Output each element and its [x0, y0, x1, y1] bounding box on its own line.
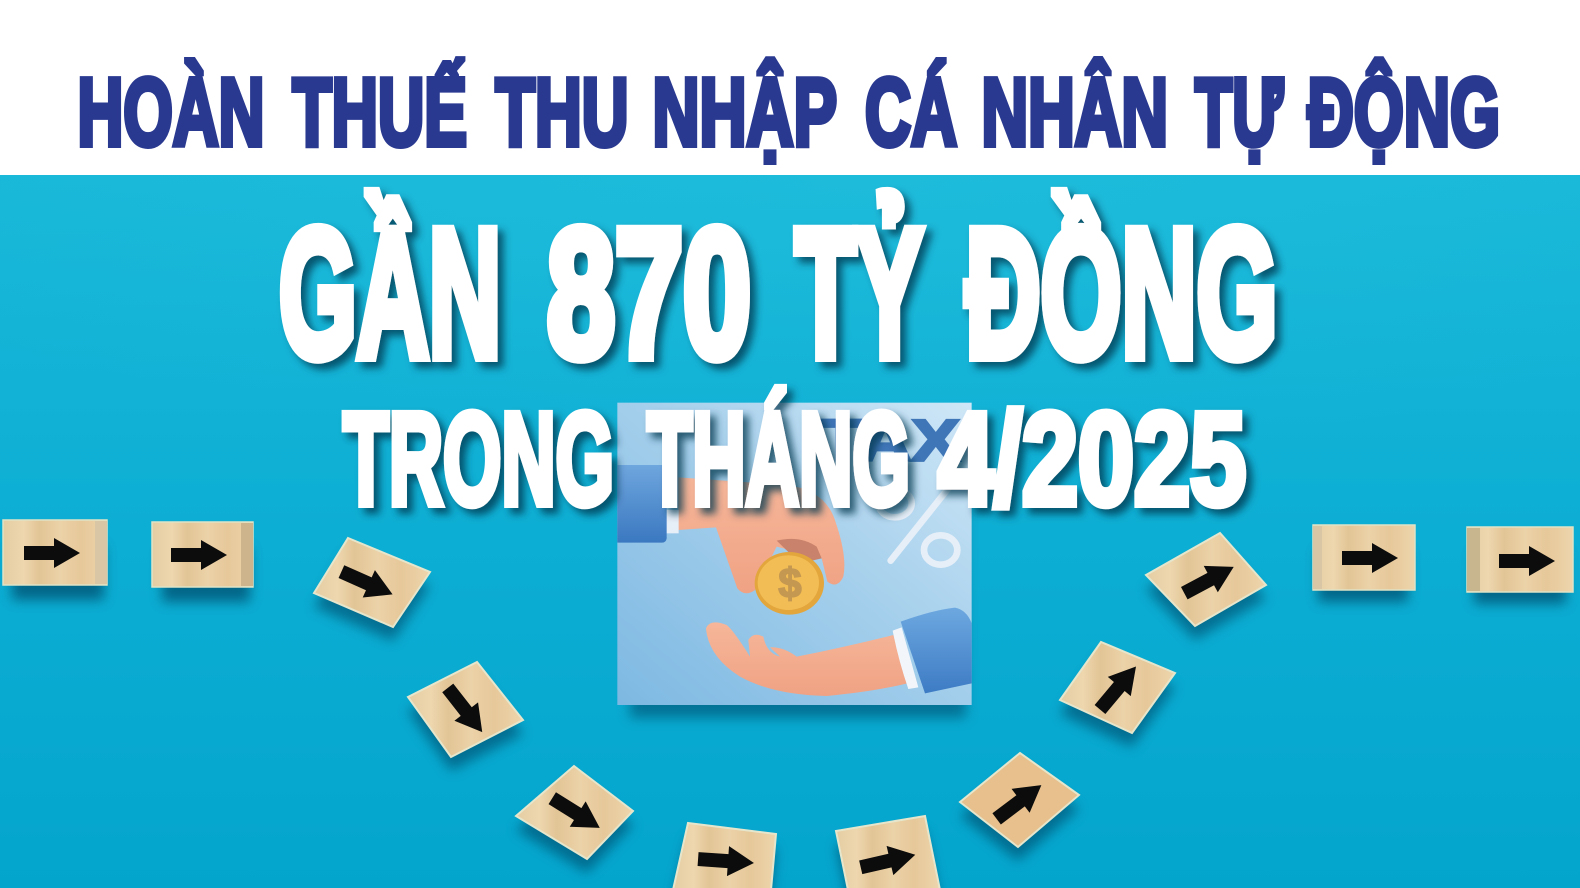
- title: hoàn thuế thu nhập cá nhân tự động: CÁ: [865, 59, 957, 166]
- coin: [755, 552, 824, 615]
- subheadline: trong tháng 4/2025: THÁNG: [647, 385, 910, 532]
- title: hoàn thuế thu nhập cá nhân tự động: NHÂN: [982, 58, 1168, 166]
- block 11: [1313, 525, 1415, 602]
- headline: gần 870 tỷ đồng: [279, 191, 1278, 395]
- block 1: [3, 520, 107, 600]
- block 8: [960, 753, 1079, 861]
- title: hoàn thuế thu nhập cá nhân tự động: THUẾ: [292, 58, 467, 166]
- upper hand and cuff: [617, 465, 844, 593]
- percent sign: [878, 488, 957, 565]
- subheadline: trong tháng 4/2025: [343, 385, 1246, 532]
- coin: $: [778, 559, 802, 606]
- title: hoàn thuế thu nhập cá nhân tự động: HOÀN: [78, 59, 264, 166]
- subheadline: trong tháng 4/2025: TRONG: [343, 385, 614, 532]
- title: hoàn thuế thu nhập cá nhân tự động: TỰ: [1195, 59, 1283, 166]
- tax label: TAX: [820, 409, 960, 474]
- white title band: [0, 0, 1580, 175]
- title: hoàn thuế thu nhập cá nhân tự động: THU: [496, 59, 628, 166]
- headline: gần 870 tỷ đồng: TỶ: [795, 191, 923, 395]
- headline: gần 870 tỷ đồng: ĐỒNG: [966, 191, 1278, 395]
- block 4: [408, 662, 523, 771]
- block 5: [516, 766, 633, 873]
- block 7: [836, 816, 940, 888]
- photo panel: hands passing a coin: [617, 403, 972, 705]
- block 6: [673, 823, 776, 888]
- subheadline: trong tháng 4/2025: 4/2025: [938, 385, 1246, 532]
- title: hoàn thuế thu nhập cá nhân tự động: [78, 58, 1500, 166]
- headline: gần 870 tỷ đồng: 870: [547, 191, 751, 395]
- headline: gần 870 tỷ đồng: GẦN: [279, 191, 501, 395]
- title: hoàn thuế thu nhập cá nhân tự động: NHẬP: [652, 58, 837, 166]
- block 2: [152, 522, 253, 602]
- block 3: [314, 538, 430, 641]
- wooden arrow blocks path: [3, 520, 1573, 888]
- block 12: [1467, 527, 1573, 604]
- block 10: [1146, 533, 1266, 640]
- photo panel shadow: [630, 420, 966, 718]
- lower hand and cuff: [706, 608, 972, 696]
- block 9: [1060, 642, 1175, 747]
